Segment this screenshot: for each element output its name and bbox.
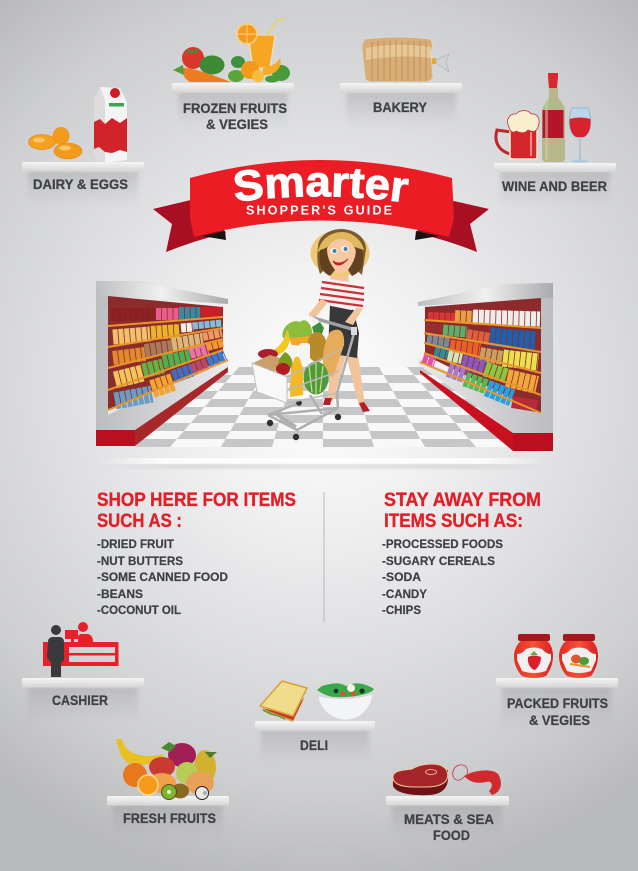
shelf: meats and sea food — [386, 764, 509, 843]
icon: vegetables and juice — [173, 19, 290, 82]
icon: milk carton — [94, 87, 127, 163]
left shelf base — [135, 367, 228, 446]
list: items to buy — [97, 537, 228, 617]
heading: stay away — [384, 490, 541, 532]
icon: fruit pile — [116, 739, 217, 800]
title banner — [153, 160, 489, 252]
shelf: dairy and eggs — [22, 87, 144, 207]
left shelf boards — [108, 317, 228, 410]
left column: shop here — [97, 490, 296, 617]
woman hair and face — [310, 229, 370, 276]
label: meats and sea food: MEATS & SEA — [404, 812, 494, 827]
woman skirt — [328, 305, 359, 358]
list: items to buy: -DRIED FRUIT — [97, 537, 175, 551]
banner title: Smarter — [234, 168, 410, 202]
heading: stay away: STAY AWAY FROM — [384, 490, 541, 511]
label: frozen fruits and vegies: FROZEN FRUITS — [183, 101, 287, 116]
list: items to buy: -NUT BUTTERS — [97, 554, 183, 568]
label: fresh fruits: FRESH FRUITS — [123, 811, 216, 826]
shopper woman — [308, 229, 370, 412]
cart wheels — [267, 400, 341, 440]
label: deli: DELI — [300, 738, 328, 753]
shelf: deli — [255, 681, 375, 766]
right shelf boards — [420, 320, 541, 413]
woman legs — [323, 353, 370, 412]
icon: strawberry jam jar — [514, 634, 553, 678]
column divider — [324, 492, 325, 622]
store scene — [96, 229, 578, 469]
left shelf back wall — [108, 296, 223, 410]
icon: beer mug — [496, 111, 539, 159]
icon: wine glass — [569, 108, 591, 162]
shopping cart — [252, 317, 357, 440]
woman neck — [330, 266, 349, 282]
icon: steak — [393, 764, 448, 795]
right grocery shelf — [418, 283, 553, 451]
icon: bread loaf — [362, 37, 449, 82]
icon: eggs — [28, 127, 82, 159]
list: items to avoid: -PROCESSED FOODS — [382, 537, 503, 551]
banner ribbon — [190, 160, 454, 237]
label: cashier: CASHIER — [52, 693, 108, 708]
label: packed fruits and vegies: & VEGIES — [529, 713, 590, 728]
list: items to buy: -BEANS — [97, 587, 143, 601]
cart basket — [252, 317, 357, 403]
label: packed fruits and vegies: PACKED FRUITS — [507, 696, 608, 711]
right shelf base — [420, 370, 513, 451]
list: items to avoid: -CANDY — [382, 587, 427, 601]
label: dairy and eggs: DAIRY & EGGS — [33, 177, 128, 192]
right shelf frame — [418, 283, 553, 433]
shelf: fresh fruits — [107, 739, 229, 841]
left shelf frame — [96, 281, 228, 430]
label: packed fruits and vegies — [507, 696, 608, 728]
banner left tail — [153, 199, 226, 252]
banner folds — [202, 231, 439, 240]
label: wine and beer: WINE AND BEER — [502, 179, 607, 194]
icon: vegetable jar — [559, 634, 598, 678]
banner right tail — [416, 199, 489, 252]
right column: stay away — [382, 490, 541, 617]
right shelf products — [423, 316, 540, 406]
shelf: frozen fruits and vegies — [172, 19, 294, 132]
icon: wine bottle — [542, 73, 565, 162]
left grocery shelf — [96, 281, 228, 446]
woman striped top — [318, 275, 364, 310]
woman arms — [308, 299, 363, 325]
shelf: cashier — [22, 622, 144, 723]
right shelf back wall — [425, 298, 541, 413]
checkered floor — [135, 367, 508, 447]
icon: shrimp — [453, 765, 501, 795]
icon: cashier desk — [43, 622, 118, 677]
label: bakery: BAKERY — [373, 100, 427, 115]
left shelf products — [111, 312, 225, 401]
list: items to avoid: -SUGARY CEREALS — [382, 554, 495, 568]
floor edge highlight — [100, 458, 546, 469]
banner subtitle: SHOPPER'S GUIDE — [246, 204, 392, 218]
heading: stay away: ITEMS SUCH AS: — [384, 511, 523, 532]
cart undercarriage — [268, 393, 338, 430]
label: meats and sea food: FOOD — [433, 828, 470, 843]
heading: shop here: SUCH AS : — [97, 511, 182, 532]
heading: shop here — [97, 490, 296, 532]
list: items to avoid — [382, 537, 503, 617]
list: items to buy: -SOME CANNED FOOD — [97, 570, 228, 584]
cart groceries — [253, 320, 344, 397]
label: frozen fruits and vegies: & VEGIES — [206, 117, 268, 132]
label: meats and sea food — [404, 812, 494, 843]
list: items to avoid: -SODA — [382, 570, 421, 584]
label: frozen fruits and vegies — [183, 101, 287, 132]
icon: salad bowl — [317, 683, 374, 720]
shelf: bakery — [340, 37, 462, 128]
shelf: wine and beer — [494, 73, 616, 207]
heading: shop here: SHOP HERE FOR ITEMS — [97, 490, 296, 511]
shelf: packed fruits and vegies — [496, 634, 618, 733]
list: items to avoid: -CHIPS — [382, 603, 421, 617]
icon: sandwich — [260, 681, 307, 722]
list: items to buy: -COCONUT OIL — [97, 603, 181, 617]
